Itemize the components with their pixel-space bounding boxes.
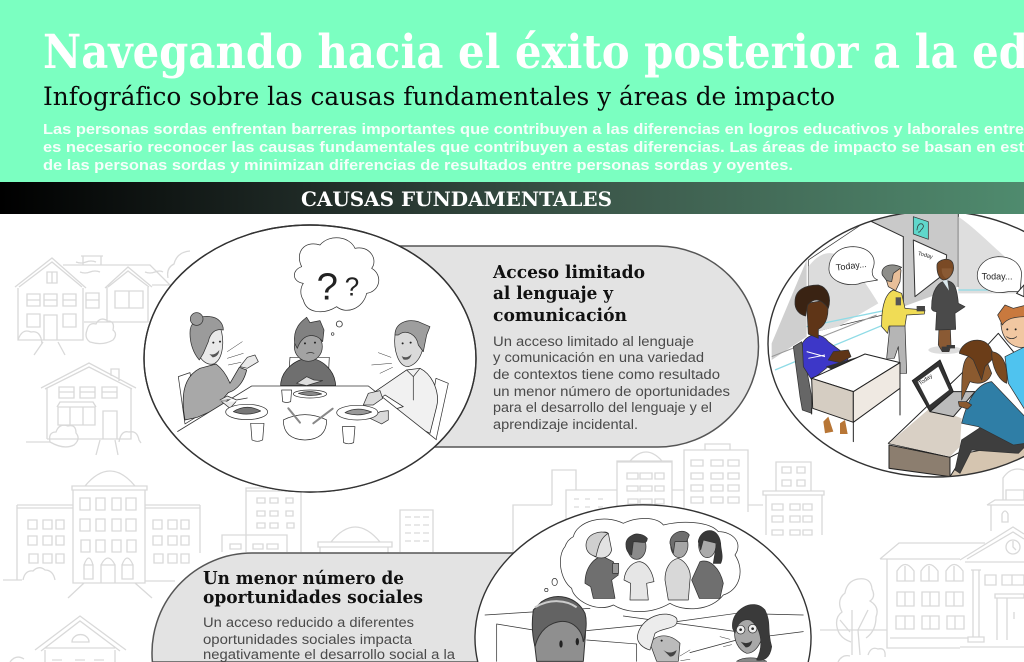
walls and whiteboards <box>772 213 1024 370</box>
thought cloud with question marks <box>294 238 379 335</box>
intro paragraph <box>43 121 1024 174</box>
food and dishes <box>226 390 378 444</box>
subtitle: Infográfico sobre las causas fundamentales y áreas de impacto <box>43 82 835 111</box>
table <box>177 386 437 497</box>
section band: causas fundamentales <box>0 182 1024 214</box>
blonde woman head <box>637 614 690 661</box>
body text: de contextos tiene como resultado <box>493 367 720 383</box>
body text <box>203 615 455 662</box>
seated woman with keyboard <box>793 285 860 413</box>
heading <box>203 568 423 608</box>
front desk <box>812 354 900 442</box>
classroom circle outline <box>768 211 1024 477</box>
body text: y comunicación en una variedad <box>493 350 704 366</box>
second house <box>26 363 141 455</box>
man in yellow sweater <box>882 265 925 373</box>
body text <box>493 334 730 433</box>
friends in thought cloud <box>585 531 723 600</box>
young man head <box>532 597 586 661</box>
student with blue shirt <box>998 305 1024 410</box>
illustration: family dinner <box>144 225 476 497</box>
child <box>281 317 336 386</box>
thought cloud <box>545 519 740 612</box>
father <box>372 321 448 440</box>
speech bubbles: Today... <box>835 259 867 273</box>
header panel <box>0 0 1024 182</box>
body text: un menor número de oportunidades <box>493 384 730 400</box>
woman presenter <box>928 259 965 354</box>
thought cloud with question marks: ? <box>345 271 359 301</box>
arms and hands on table <box>220 391 388 424</box>
back desk with laptop <box>888 333 1024 477</box>
back desk with laptop: Today <box>918 373 934 387</box>
intro paragraph: de las personas sordas y minimizan diferencias de resultados entre personas sordas y oyentes. <box>43 157 793 174</box>
intro paragraph: es necesario reconocer las causas fundamentales que contribuyen a estas diferencias. Las áreas de impacto se basan en est <box>43 139 1024 156</box>
woman with glasses head <box>720 605 772 661</box>
panel: oportunidades sociales <box>152 553 520 662</box>
background cityscape line art <box>3 251 1024 662</box>
walls and whiteboards: Today <box>917 251 933 261</box>
body text: oportunidades sociales impacta <box>203 632 412 648</box>
body text: para el desarrollo del lenguaje y el <box>493 400 712 416</box>
speech bubbles <box>829 247 1024 297</box>
top-row skyline <box>513 444 824 552</box>
tree <box>837 579 885 662</box>
heading: al lenguaje y <box>493 283 614 304</box>
body text: aprendizaje incidental. <box>493 417 638 433</box>
heading: Acceso limitado <box>492 262 645 283</box>
apartment school block <box>3 471 200 598</box>
mid-row buildings <box>222 488 433 553</box>
panel: acceso limitado <box>390 246 758 447</box>
body text: Un acceso limitado al lenguaje <box>493 334 694 350</box>
illustration: classroom <box>760 211 1024 478</box>
mother <box>178 313 258 424</box>
body text: Un acceso reducido a diferentes <box>203 615 414 631</box>
university hall <box>820 469 1024 648</box>
heading: comunicación <box>493 305 627 326</box>
student with ponytail <box>955 340 1024 473</box>
section band: causas fundamentales: CAUSAS FUNDAMENTALES <box>301 187 612 211</box>
heading: Un menor número de <box>203 568 404 589</box>
bottom-left house <box>10 616 126 662</box>
heading <box>492 262 645 326</box>
heading: oportunidades sociales <box>203 587 423 608</box>
room lines <box>485 608 803 661</box>
callout pill <box>152 553 520 662</box>
thought cloud with question marks: ? <box>317 265 338 308</box>
illustration: social imagination <box>475 505 811 662</box>
speech bubbles: Today... <box>982 271 1012 281</box>
callout pill <box>390 246 758 447</box>
house with two gables <box>15 251 190 355</box>
social circle outline <box>475 505 811 662</box>
intro paragraph: Las personas sordas enfrentan barreras importantes que contribuyen a las diferencias en logros educativos y laborales entre <box>43 121 1024 138</box>
